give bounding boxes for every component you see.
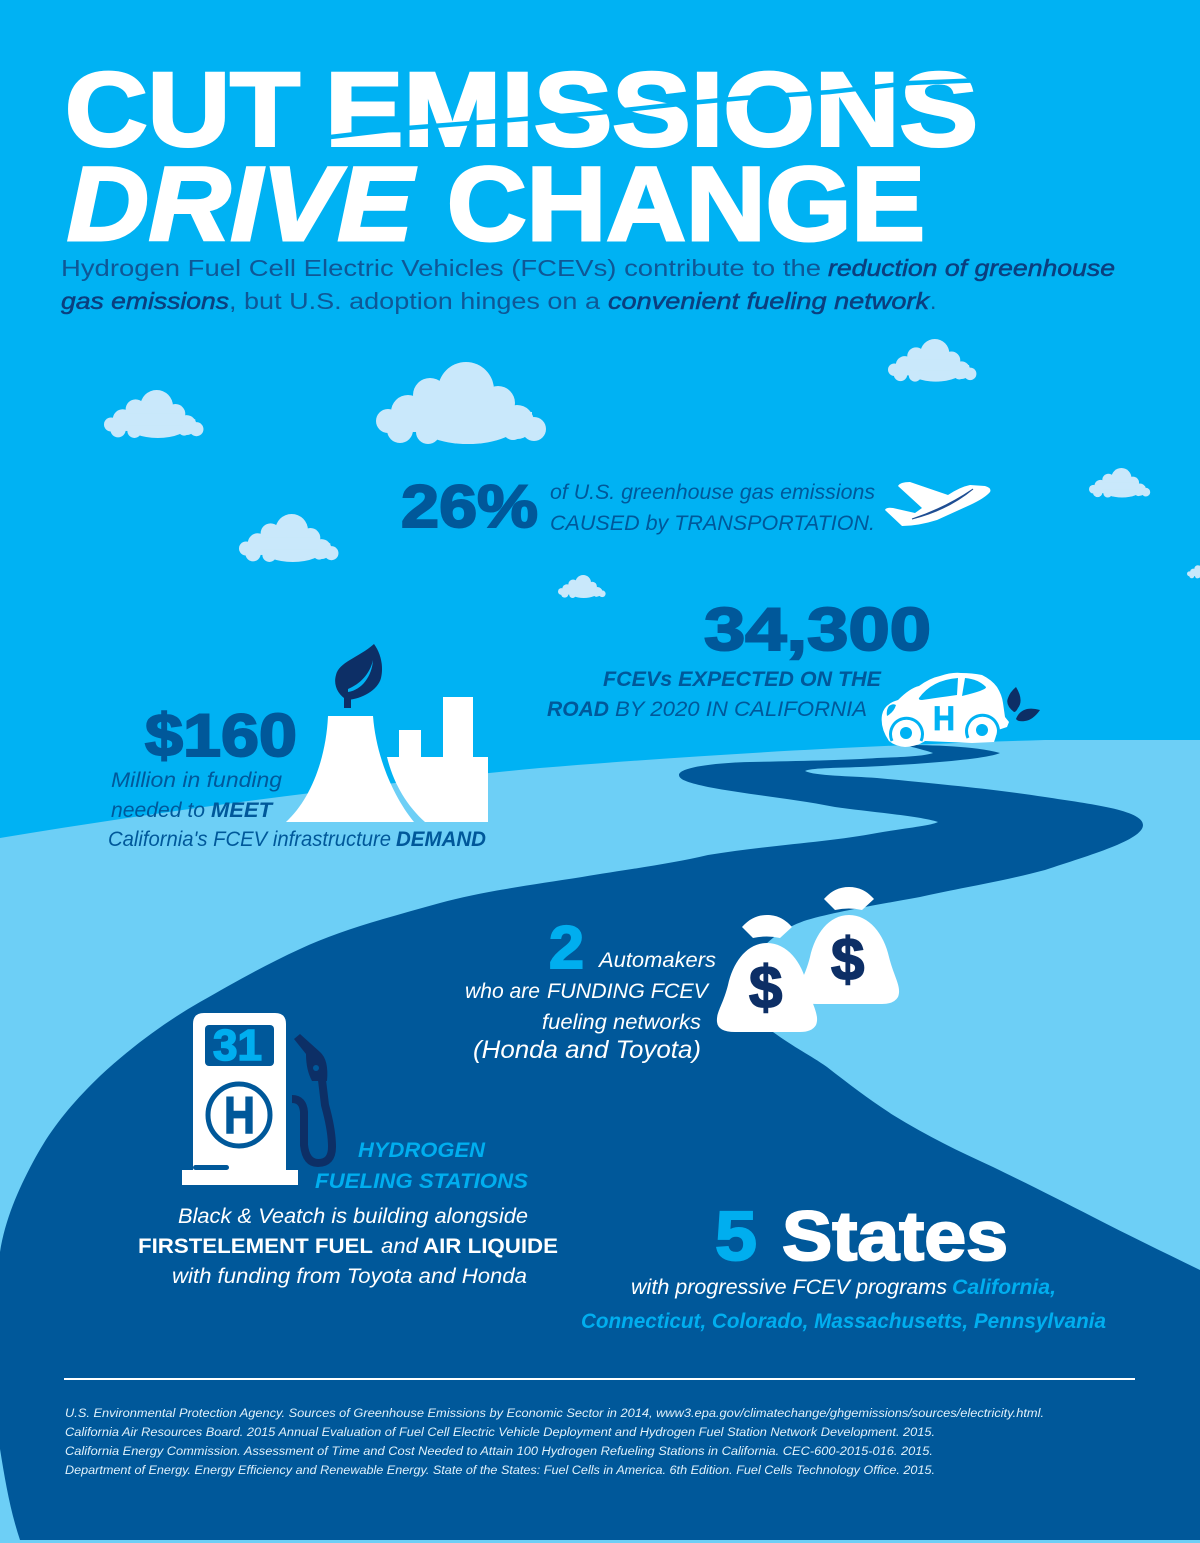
stat: 2 automakers: Automakers — [597, 949, 717, 972]
title: CHANGE — [447, 146, 925, 263]
stat: hydrogen fueling stations: and — [381, 1235, 419, 1258]
icon: money bag front: $ — [749, 954, 782, 1021]
icon: factory — [286, 697, 488, 822]
stat: 5 states: California, — [952, 1276, 1056, 1299]
subtitle: . — [930, 288, 936, 314]
stat: hydrogen fueling stations: FIRSTELEMENT FUEL — [138, 1235, 373, 1258]
stat: $160: MEET — [211, 799, 274, 822]
stat: 2 automakers — [465, 914, 717, 1064]
icon: money bag back: $ — [831, 926, 864, 993]
stat: 2 automakers: 2 — [549, 914, 584, 981]
icon: hydrogen car: H — [933, 700, 955, 738]
stat: 2 automakers: FUNDING FCEV — [547, 980, 710, 1003]
stat: $160 — [108, 702, 486, 851]
icon: leaves behind car — [1007, 687, 1040, 721]
stat: $160: DEMAND — [396, 828, 486, 851]
stat: $160: $160 — [145, 702, 297, 769]
stat: $160: needed to — [111, 799, 205, 822]
stat: 34,300: FCEVs EXPECTED ON THE — [603, 668, 882, 691]
stat: 26 percent: 26% — [401, 473, 538, 540]
cloud middle — [239, 514, 338, 562]
subtitle: convenient fueling network — [608, 288, 931, 314]
icon: hydrogen car — [882, 673, 1009, 747]
stat: hydrogen fueling stations: with funding from Toyota and Honda — [172, 1265, 527, 1288]
cloud top right — [888, 339, 976, 382]
subtitle: Hydrogen Fuel Cell Electric Vehicles (FCEVs) contribute to the — [61, 255, 821, 281]
icon: airplane — [885, 482, 990, 526]
icon: leaf on tower — [335, 644, 382, 708]
winding road — [0, 745, 1200, 1540]
footnotes: Department of Energy. Energy Efficiency and Renewable Energy. State of the States: Fuel Cells in America. 6th Edition. Fuel Cells Technology Office. 2015. — [65, 1465, 935, 1477]
footnotes: California Air Resources Board. 2015 Annual Evaluation of Fuel Cell Electric Vehicle Deployment and Hydrogen Fuel Station Network Development. 2015. — [65, 1427, 935, 1439]
stat: 5 states: Connecticut, Colorado, Massachusetts, Pennsylvania — [581, 1310, 1106, 1333]
cloud large — [376, 362, 546, 444]
stat: 2 automakers: who are — [465, 980, 540, 1003]
title: DRIVE — [67, 146, 416, 263]
icon: money bag front — [717, 915, 817, 1032]
cloud right — [1089, 468, 1150, 498]
title — [65, 52, 985, 263]
stat: 5 states — [581, 1197, 1106, 1333]
stat: 5 states: States — [782, 1197, 1008, 1275]
stat: $160: California's FCEV infrastructure — [108, 828, 391, 851]
footnotes: U.S. Environmental Protection Agency. Sources of Greenhouse Emissions by Economic Sector in 2014, www3.epa.gov/climatechange/ghgemissions/sources/electricity.html. — [65, 1408, 1044, 1420]
subtitle: gas emissions — [61, 288, 230, 314]
cloud left — [104, 390, 203, 438]
ground hill — [0, 740, 1200, 1543]
stat: hydrogen fueling stations: HYDROGEN — [358, 1139, 486, 1162]
stat: hydrogen fueling stations: Black & Veatch is building alongside — [178, 1205, 528, 1228]
stat: 34,300: 34,300 — [704, 596, 931, 663]
stat: 34,300: ROAD — [547, 698, 609, 721]
cloud right edge — [1187, 562, 1200, 578]
title: EMISSIONS — [325, 52, 978, 168]
stat: 2 automakers: fueling networks — [542, 1011, 702, 1034]
footnotes — [65, 1408, 1044, 1477]
stat: 5 states: 5 — [715, 1197, 757, 1275]
stat: hydrogen fueling stations: AIR LIQUIDE — [423, 1235, 558, 1258]
stat: 34,300: BY 2020 IN CALIFORNIA — [615, 698, 867, 721]
stat: 2 automakers: (Honda and Toyota) — [473, 1036, 701, 1064]
stat: hydrogen fueling stations: FUELING STATIONS — [315, 1170, 528, 1193]
subtitle: , but U.S. adoption hinges on a — [229, 288, 600, 314]
stat: 5 states: with progressive FCEV programs — [631, 1276, 948, 1299]
stat: hydrogen fueling stations — [138, 1139, 558, 1288]
subtitle — [61, 255, 1115, 314]
icon: money bag back — [799, 887, 899, 1004]
footnotes: California Energy Commission. Assessment of Time and Cost Needed to Attain 100 Hydrogen Refueling Stations in California. CEC-600-2015-016. 2015. — [65, 1446, 933, 1458]
title: CUT — [65, 52, 300, 168]
stat: 34,300 — [547, 596, 931, 721]
icon: hydrogen fuel pump: 31 — [213, 1021, 262, 1070]
subtitle: reduction of greenhouse — [828, 255, 1115, 281]
stat: $160: Million in funding — [111, 769, 282, 792]
cloud small — [558, 575, 606, 598]
icon: hydrogen fuel pump: H — [224, 1087, 255, 1145]
stat: 26 percent — [401, 473, 876, 540]
stat: 26 percent: CAUSED by TRANSPORTATION. — [550, 512, 875, 535]
icon: hydrogen fuel pump — [182, 1013, 332, 1185]
stat: 26 percent: of U.S. greenhouse gas emissions — [550, 481, 876, 504]
